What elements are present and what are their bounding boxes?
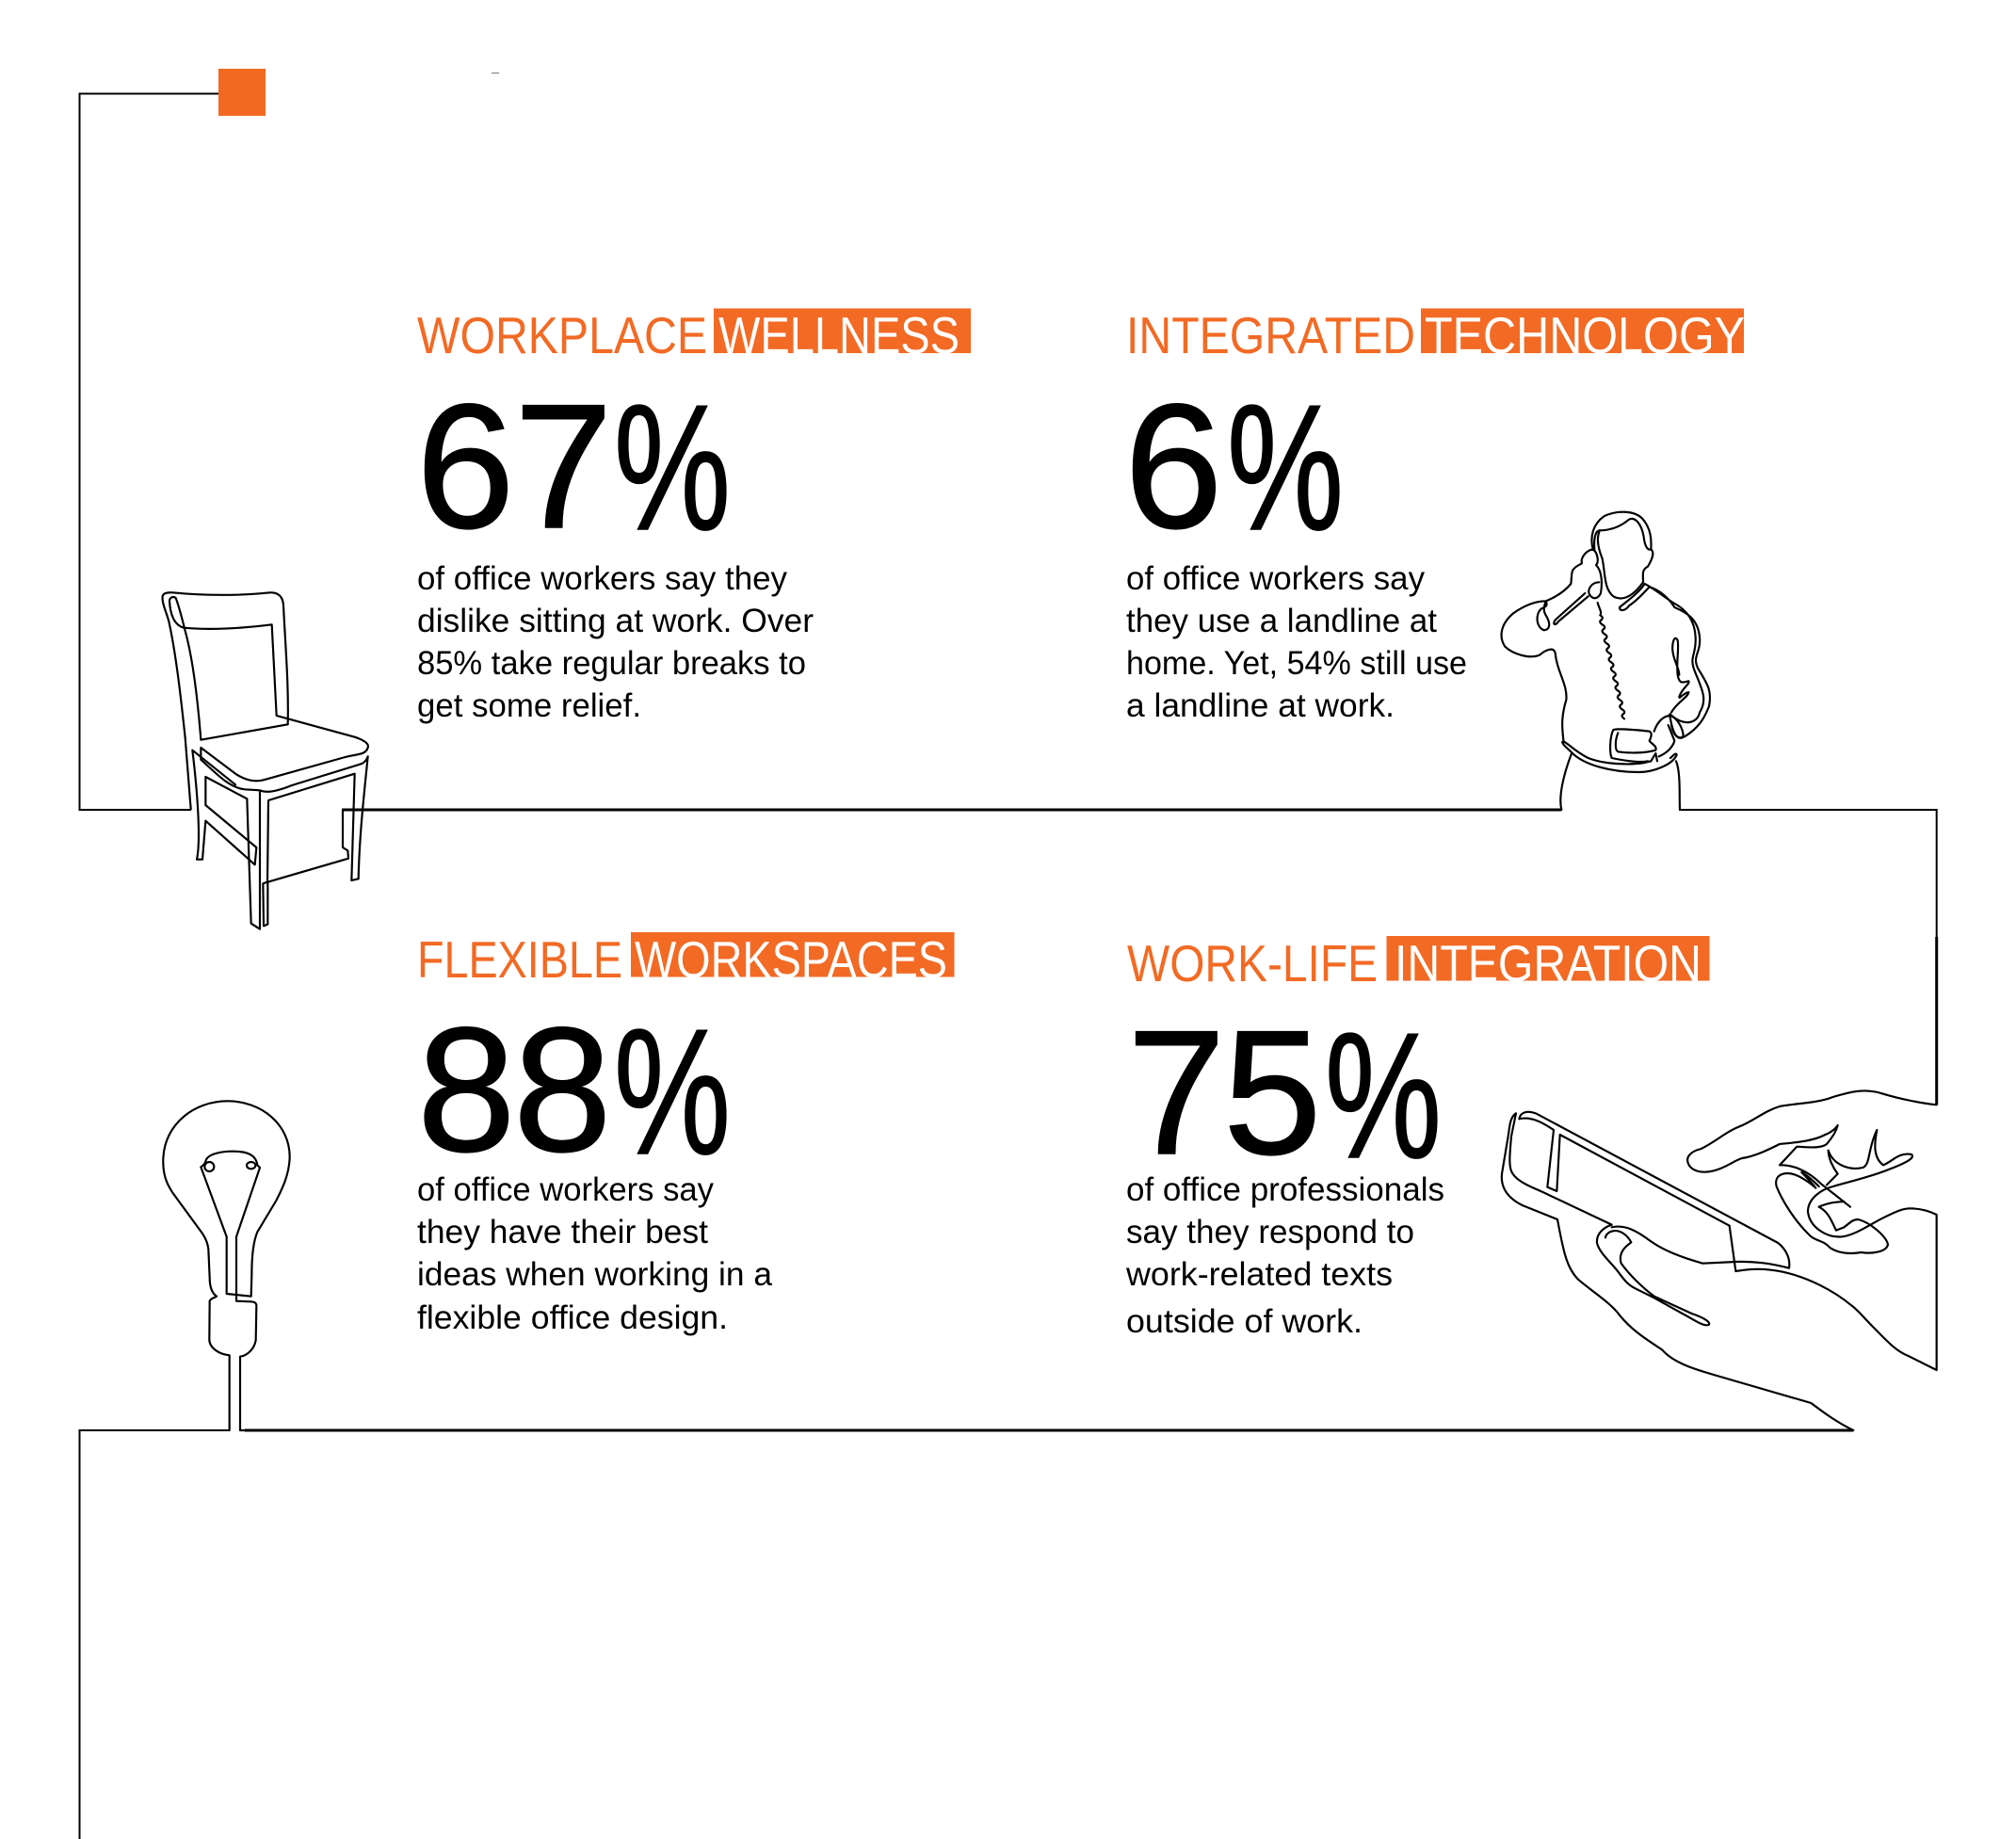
panel: flexible workspaces <box>417 930 955 1336</box>
coiled telephone cord <box>1598 603 1624 718</box>
heading: flexible workspaces: WORKSPACES <box>635 930 947 989</box>
connector line: man on phone to right hand <box>1679 810 1937 937</box>
connector line: top left to chair <box>79 94 218 810</box>
lower hand and phone <box>1502 1112 1853 1430</box>
heading: work-life integration: WORK-LIFE <box>1127 934 1378 992</box>
body text: integration: of office professionals <box>1126 1170 1444 1208</box>
connector line: bulb to page bottom <box>79 1430 229 1839</box>
body text: integration: work-related texts <box>1125 1255 1393 1293</box>
stat: 67%: 67 <box>416 367 613 565</box>
connector line: chair to man on phone <box>342 808 1561 812</box>
stat: 75% <box>1127 993 1442 1196</box>
stat: 6%: % <box>1227 368 1344 568</box>
panel: workplace wellness <box>416 306 971 724</box>
heading: work-life integration: INTEGRATION <box>1395 934 1702 992</box>
icon: man on telephone <box>1502 512 1710 810</box>
icon: light bulb <box>163 1101 290 1430</box>
body text: workspaces: of office workers say <box>417 1170 714 1208</box>
telephone base and hand <box>1610 638 1689 762</box>
stat: 6% <box>1124 367 1344 568</box>
heading: work-life integration <box>1127 934 1710 992</box>
stat: 75%: % <box>1325 996 1442 1196</box>
icon: chair <box>163 592 368 929</box>
body text: wellness <box>417 559 814 724</box>
icon: hands holding phone <box>1502 1090 1937 1430</box>
body text: workspaces: ideas when working in a <box>417 1255 772 1293</box>
body text: integration <box>1125 1170 1444 1340</box>
heading: workplace wellness: WORKPLACE <box>417 306 707 364</box>
body text: technology: home. Yet, 54% still use <box>1126 644 1467 682</box>
panel: integrated technology <box>1124 306 1745 724</box>
heading: integrated technology <box>1126 306 1745 364</box>
heading: integrated technology: INTEGRATED <box>1126 306 1415 364</box>
heading: flexible workspaces <box>417 930 955 989</box>
body text: wellness: 85% take regular breaks to <box>417 644 806 682</box>
body text: integration: say they respond to <box>1126 1213 1414 1250</box>
heading: workplace wellness: WELLNESS <box>718 306 960 364</box>
stat: 75%: 75 <box>1127 993 1322 1191</box>
orange start square <box>218 69 266 116</box>
heading: workplace wellness <box>417 306 971 364</box>
heading: flexible workspaces: FLEXIBLE <box>417 930 622 989</box>
body text: technology <box>1126 559 1467 724</box>
upper pointing hand <box>1687 1090 1937 1370</box>
panel: work-life integration <box>1125 934 1710 1340</box>
body text: workspaces: flexible office design. <box>417 1299 728 1336</box>
body text: workspaces <box>417 1170 772 1336</box>
heading: integrated technology: TECHNOLOGY <box>1425 306 1745 364</box>
connector line: bulb to phone hand <box>245 1429 1853 1431</box>
stat: 67%: % <box>614 368 731 568</box>
torso and raised arm <box>1502 549 1680 810</box>
body text: wellness: get some relief. <box>417 686 641 724</box>
body text: technology: a landline at work. <box>1126 686 1395 724</box>
head and hair <box>1591 512 1653 598</box>
body text: workspaces: they have their best <box>417 1213 708 1250</box>
connector line: right edge into upper hand <box>1935 937 1938 1105</box>
body text: technology: they use a landline at <box>1126 602 1437 639</box>
collar and right arm <box>1620 584 1710 737</box>
stat: 88%: 88 <box>417 991 612 1188</box>
stat: 6%: 6 <box>1124 367 1223 565</box>
stat: 88%: % <box>614 992 731 1192</box>
body text: integration: outside of work. <box>1126 1302 1363 1340</box>
body text: technology: of office workers say <box>1126 559 1425 597</box>
body text: wellness: of office workers say they <box>417 559 787 597</box>
stat: 88% <box>417 991 731 1192</box>
body text: wellness: dislike sitting at work. Over <box>417 602 814 639</box>
stat: 67% <box>416 367 731 568</box>
